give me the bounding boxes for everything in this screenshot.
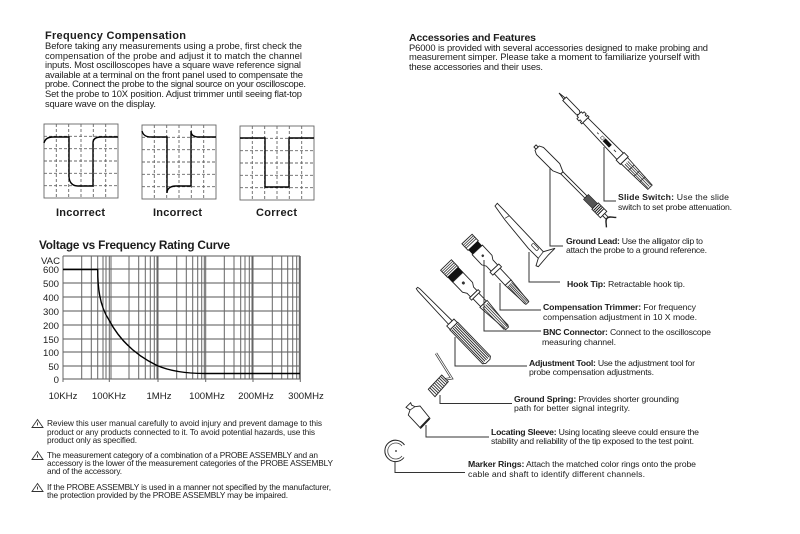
- icon: hook tip: [495, 203, 555, 267]
- y axis labels: 150: [43, 335, 59, 346]
- label: Correct: Correct: [256, 207, 297, 219]
- warning 2: accessory is the lower of the measurement categories of the PROBE ASSEMBLY: [47, 458, 333, 468]
- label: Adjustment Tool: [529, 358, 695, 377]
- icon: adjustment tool: [413, 284, 492, 365]
- icon: warning triangle: [32, 420, 43, 428]
- label: BNC Connector: BNC Connector: Connect to the oscilloscope: [543, 327, 711, 337]
- y axis labels: [41, 256, 60, 386]
- text block: accessories intro: these accessories and their uses.: [409, 61, 543, 72]
- y axis labels: 500: [43, 279, 59, 290]
- label: Adjustment Tool: probe compensation adjustments.: [529, 367, 654, 377]
- y axis labels: 300: [43, 307, 59, 318]
- line chart: voltage vs frequency rating curve: [41, 256, 324, 402]
- label: Ground Spring: Ground Spring: Provides shorter grounding: [514, 394, 679, 404]
- label: Ground Lead: Ground Lead: Use the alligator clip to: [566, 236, 703, 246]
- label: Adjustment Tool: Adjustment Tool: Use the adjustment tool for: [529, 358, 695, 368]
- heading: Frequency Compensation: Frequency Compensation: [45, 30, 186, 42]
- label: BNC Connector: measuring channel.: [542, 337, 616, 347]
- text block: frequency compensation instructions: Before taking any measurements using a probe, first check the: [45, 40, 302, 51]
- icon: warning triangle: [32, 452, 43, 460]
- label: Compensation Trimmer: [543, 302, 697, 322]
- y axis labels: 600: [43, 265, 59, 276]
- text block: frequency compensation instructions: [45, 40, 306, 109]
- leader: slide switch: [604, 147, 616, 201]
- warning 1: product or any products connected to it. To avoid potential hazards, use this: [47, 427, 315, 437]
- icon: probe: [555, 89, 654, 191]
- warning 2: [32, 450, 333, 476]
- text block: frequency compensation instructions: square wave on the display.: [45, 98, 156, 109]
- warning 2: The measurement category of a combination of a PROBE ASSEMBLY and an: [47, 450, 318, 460]
- x axis labels: 1MHz: [146, 391, 172, 402]
- heading: Voltage vs Frequency Rating Curve: Voltage vs Frequency Rating Curve: [39, 238, 230, 252]
- icon: locating sleeve: [406, 403, 430, 428]
- warning 3: If the PROBE ASSEMBLY is used in a manner not specified by the manufacturer,: [47, 482, 331, 492]
- y axis labels: 100: [43, 348, 59, 359]
- label: Ground Lead: [566, 236, 707, 255]
- label: Locating Sleeve: stability and reliability of the tip exposed to the test point.: [491, 436, 694, 446]
- leader: BNC connector: [484, 260, 541, 331]
- icon: ground lead: [530, 141, 616, 227]
- y axis labels: VAC: [41, 256, 60, 267]
- label: Incorrect: Incorrect: [153, 207, 202, 219]
- warning 1: product only as specified.: [47, 435, 137, 445]
- leader: adjustment tool: [455, 337, 527, 366]
- x axis labels: [49, 391, 324, 402]
- x axis labels: 300MHz: [288, 391, 324, 402]
- y axis labels: 400: [43, 293, 59, 304]
- x axis labels: 100KHz: [92, 391, 126, 402]
- label: Slide Switch: [618, 192, 732, 212]
- leader: compensation trimmer: [500, 283, 541, 310]
- text block: frequency compensation instructions: available at a terminal on the front panel used to compensate the: [45, 69, 303, 80]
- label: Marker Rings: cable and shaft to identify different channels.: [468, 469, 645, 479]
- label: Ground Spring: path for better signal integrity.: [514, 403, 630, 413]
- x axis labels: 200MHz: [238, 391, 274, 402]
- label: Hook Tip: Hook Tip: Retractable hook tip.: [567, 279, 685, 289]
- label: Ground Spring: [514, 394, 679, 413]
- label: Slide Switch: switch to set probe attenuation.: [618, 202, 732, 212]
- y axis labels: 50: [48, 362, 59, 373]
- warning 1: Review this user manual carefully to avoid injury and prevent damage to this: [47, 418, 322, 428]
- text block: frequency compensation instructions: probe. Connect the probe to the signal source on your oscilloscope.: [45, 78, 306, 89]
- label: Marker Rings: Marker Rings: Attach the matched color rings onto the probe: [468, 459, 696, 469]
- y axis labels: 0: [54, 375, 59, 386]
- icon: ground spring: [428, 353, 452, 397]
- leader: ground lead: [550, 168, 563, 246]
- text block: frequency compensation instructions: compensation of the probe and adjust it to match the channel: [45, 50, 302, 61]
- warning 3: [32, 482, 331, 500]
- text block: accessories intro: measurement simper. Please take a moment to familiarize yourself with: [409, 51, 700, 62]
- label: Compensation Trimmer: compensation adjustment in 10 X mode.: [543, 312, 697, 322]
- x axis labels: 10KHz: [49, 391, 78, 402]
- label: Locating Sleeve: Locating Sleeve: Using locating sleeve could ensure the: [491, 427, 699, 437]
- label: Marker Rings: [468, 459, 696, 479]
- heading: Accessories and Features: Accessories and Features: [409, 32, 536, 44]
- icon: compensation trimmer: [462, 234, 532, 308]
- warning 1: [32, 418, 322, 445]
- panel: incorrect waveform, overcompensated: [44, 124, 118, 198]
- text block: accessories intro: P6000 is provided with several accessories designed to make probing and: [409, 42, 708, 53]
- label: BNC Connector: [542, 327, 711, 347]
- icon: warning triangle: [32, 484, 43, 492]
- text block: accessories intro: [409, 42, 708, 72]
- x axis labels: 100MHz: [189, 391, 225, 402]
- text block: frequency compensation instructions: inputs. Most oscilloscopes have a square wave reference signal: [45, 59, 301, 70]
- panel: correct waveform: [240, 126, 314, 200]
- leader: locating sleeve: [426, 425, 489, 437]
- label: Compensation Trimmer: Compensation Trimmer: For frequency: [543, 302, 697, 312]
- y axis labels: 200: [43, 321, 59, 332]
- warning 2: and of the accessory.: [47, 466, 122, 476]
- leader: marker rings: [395, 462, 465, 472]
- text block: frequency compensation instructions: Set the probe to 10X position. Adjust trimmer until seeing flat-top: [45, 88, 302, 99]
- label: Incorrect: Incorrect: [56, 207, 105, 219]
- warning 3: the protection provided by the PROBE ASSEMBLY may be impaired.: [47, 490, 288, 500]
- icon: marker ring: [385, 440, 404, 462]
- curve: [63, 270, 300, 374]
- label: Slide Switch: Slide Switch: Use the slide: [618, 192, 729, 202]
- icon: BNC connector: [441, 260, 513, 334]
- label: Locating Sleeve: [491, 427, 699, 446]
- panel: incorrect waveform, undercompensated: [142, 125, 216, 199]
- leader: ground spring: [440, 395, 512, 404]
- leader: hook tip: [529, 252, 560, 282]
- label: Ground Lead: attach the probe to a ground reference.: [566, 245, 707, 255]
